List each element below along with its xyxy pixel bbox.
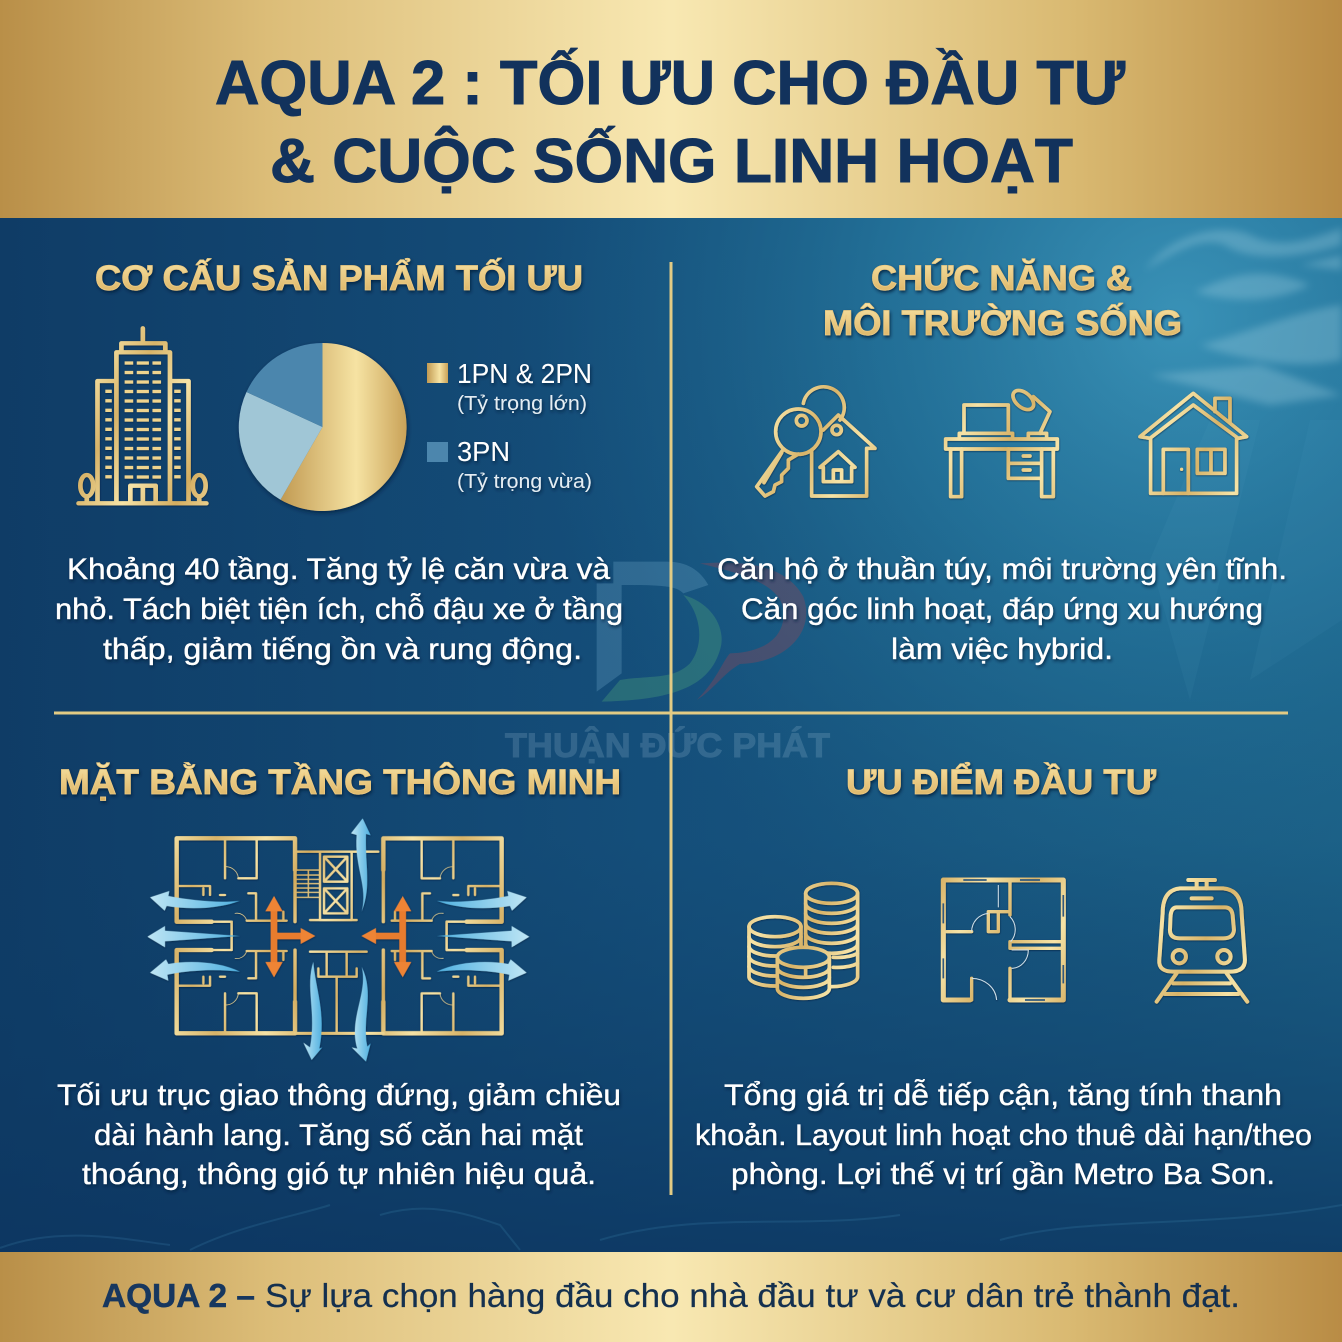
- legend: 1PN & 2PN: [457, 358, 592, 389]
- airflow: orange arrows: [265, 896, 411, 977]
- icon: desk with laptop and lamp: [946, 387, 1057, 497]
- legend: (Tỷ trọng vừa): [457, 471, 592, 493]
- body text: phòng. Lợi thế vị trí gần Metro Ba Son.: [731, 1158, 1275, 1191]
- airflow: blue arrows: [147, 818, 529, 1062]
- watermark: Thuận Đức Phát logo: [505, 562, 830, 765]
- pie chart: [239, 343, 407, 511]
- body text: Tổng giá trị dễ tiếp cận, tăng tính thanh: [724, 1079, 1282, 1112]
- icon: house: [1140, 393, 1247, 493]
- heading: CƠ CẤU SẢN PHẨM TỐI ƯU: [95, 258, 583, 298]
- title: AQUA 2 : TỐI ƯU CHO ĐẦU TƯ: [215, 49, 1126, 118]
- icon: metro train: [1157, 880, 1247, 1002]
- panel: ưu điểm đầu tư: [695, 762, 1312, 1191]
- watermark: Thuận Đức Phát logo: THUẬN ĐỨC PHÁT: [505, 727, 830, 765]
- body text: [57, 1079, 621, 1191]
- central core: [295, 852, 383, 1033]
- legend: (Tỷ trọng lớn): [457, 393, 587, 415]
- apartments: [177, 838, 502, 1033]
- body text: nhỏ. Tách biệt tiện ích, chỗ đậu xe ở tầng: [55, 593, 623, 626]
- heading: [823, 258, 1182, 343]
- panel: chức năng và môi trường sống: [717, 258, 1287, 666]
- heading: MÔI TRƯỜNG SỐNG: [823, 303, 1182, 343]
- icon: keys with house tag: [757, 387, 875, 496]
- panel: mặt bằng tầng thông minh: [57, 762, 621, 1191]
- header banner: [0, 0, 1342, 218]
- title: & CUỘC SỐNG LINH HOẠT: [270, 127, 1073, 196]
- body text: [55, 553, 623, 666]
- body text: [717, 553, 1287, 666]
- body text: Tối ưu trục giao thông đứng, giảm chiều: [57, 1079, 621, 1112]
- icon: tower: [79, 328, 206, 503]
- icon: coin stacks: [749, 883, 858, 998]
- body text: thấp, giảm tiếng ồn và rung động.: [103, 633, 582, 666]
- quadrant dividers: [54, 262, 1288, 1195]
- icon: apartment floor plan: [943, 880, 1063, 1000]
- body text: khoản. Layout linh hoạt cho thuê dài hạn/theo: [695, 1119, 1312, 1152]
- floor plan with airflow arrows: [147, 818, 529, 1062]
- legend: [427, 358, 592, 493]
- water background: [0, 218, 1342, 1252]
- body text: Khoảng 40 tầng. Tăng tỷ lệ căn vừa và: [67, 553, 610, 586]
- footer banner: [0, 1252, 1342, 1342]
- footer text: Sự lựa chọn hàng đầu cho nhà đầu tư và cư dân trẻ thành đạt.: [265, 1277, 1240, 1314]
- heading: ƯU ĐIỂM ĐẦU TƯ: [846, 762, 1157, 802]
- heading: CHỨC NĂNG &: [871, 258, 1132, 298]
- body text: thoáng, thông gió tự nhiên hiệu quả.: [82, 1158, 596, 1191]
- panel: cơ cấu sản phẩm: [55, 258, 623, 666]
- heading: MẶT BẰNG TẦNG THÔNG MINH: [59, 762, 621, 802]
- legend: 3PN: [457, 436, 510, 467]
- body text: Căn hộ ở thuần túy, môi trường yên tĩnh.: [717, 553, 1287, 586]
- body text: Căn góc linh hoạt, đáp ứng xu hướng: [741, 593, 1263, 626]
- body text: làm việc hybrid.: [891, 633, 1113, 666]
- title: [215, 49, 1126, 196]
- body text: dài hành lang. Tăng số căn hai mặt: [94, 1119, 584, 1152]
- body text: [695, 1079, 1312, 1191]
- footer text: AQUA 2 –: [102, 1277, 255, 1314]
